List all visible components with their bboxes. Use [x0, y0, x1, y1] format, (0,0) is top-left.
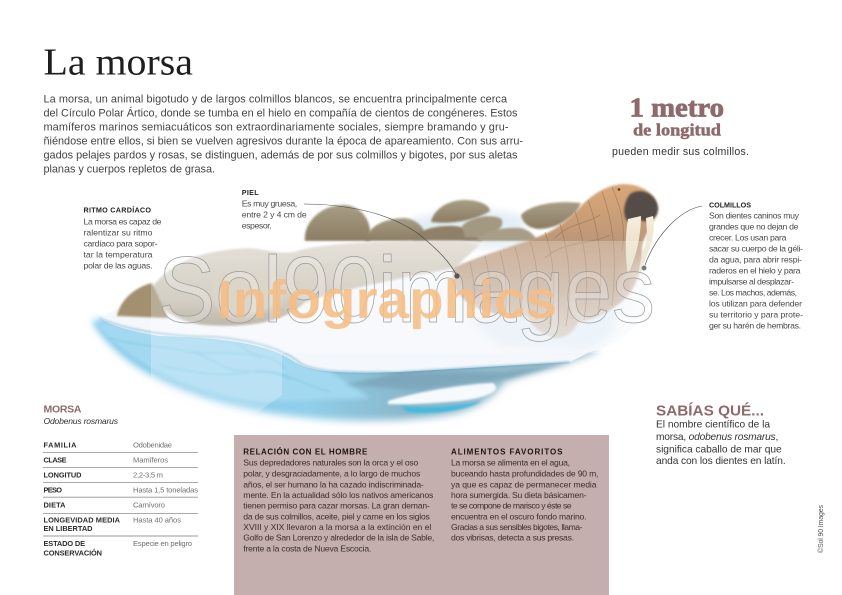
table rows	[43, 440, 198, 557]
label: ritmo cardíaco: cardíaco para sopor-	[84, 239, 158, 249]
callout: sabías qué: El nombre científico de la	[656, 419, 770, 430]
intro text block: La morsa, un animal bigotudo y de largos colmillos blancos, se encuentra principalmente cerca	[44, 94, 508, 106]
tusk left	[626, 216, 641, 274]
callout: 1 metro de longitud: de longitud	[633, 120, 721, 140]
label: colmillos: se. Los machos, además,	[709, 288, 797, 298]
water	[92, 320, 600, 421]
label: piel: Es muy gruesa,	[242, 199, 297, 209]
walrus muzzle	[624, 191, 658, 223]
column: relación con el hombre: tienen permiso para cazar morsas. La gran deman-	[243, 501, 430, 511]
tusk right	[639, 216, 654, 277]
panel: relación con el hombre y alimentos favoritos	[234, 435, 609, 595]
table rows: Odobenidae	[133, 440, 172, 449]
far rocks	[305, 200, 581, 241]
table rows: Hasta 40 años	[133, 515, 181, 524]
table rows: EN LIBERTAD	[44, 524, 93, 533]
species name: Odobenus rosmarus	[44, 416, 119, 426]
column: relación con el hombre: Sus depredadores naturales son la orca y el oso	[243, 458, 419, 468]
column: relación con el hombre: XVIII y XIX llevaron a la morsa a la extinción en el	[243, 522, 431, 532]
column: alimentos favoritos: te se compone de marisco y éste se	[451, 501, 572, 511]
species name	[44, 404, 119, 426]
column: relación con el hombre: frente a la costa de Nueva Escocia.	[243, 543, 371, 553]
column: relación con el hombre: años, el ser humano la ha cazado indiscriminada-	[243, 479, 424, 489]
species fact table	[43, 404, 198, 557]
walrus wrinkles	[470, 187, 624, 326]
intro text block: mamíferos marinos semiacuáticos son extraordinariamente sociales, siempre bramando y gru-	[44, 122, 509, 134]
column: relación con el hombre: RELACIÓN CON EL HOMBRE	[243, 447, 368, 456]
label: colmillos: ger su harén de hembras.	[709, 321, 801, 331]
leader: piel	[304, 204, 460, 279]
table rows: 2,2-3,5 m	[133, 470, 163, 479]
intro text block: planas y cuerpos repletos de grasa.	[44, 164, 215, 176]
callout: 1 metro de longitud: 1 metro	[630, 92, 724, 122]
table rows: LONGEVIDAD MEDIA	[44, 515, 121, 524]
label: ritmo cardíaco: polar de las aguas.	[84, 261, 152, 271]
callout: sabías qué	[656, 403, 786, 467]
table rows: Carnívoro	[133, 500, 165, 509]
callout: sabías qué: morsa, odobenus rosmarus,	[656, 432, 778, 443]
label: piel: entre 2 y 4 cm de	[242, 210, 307, 220]
label: colmillos: grandes que no dejan de	[709, 222, 799, 232]
table rows: DIETA	[44, 500, 66, 509]
column: relación con el hombre: mente. En la actualidad sólo los nativos americanos	[243, 490, 433, 500]
ice background	[100, 262, 648, 373]
label: ritmo cardíaco	[84, 206, 162, 271]
column: alimentos favoritos: encuentra en el oscuro fondo marino.	[451, 511, 586, 521]
label: colmillos: raderos en el hielo y para	[709, 266, 801, 276]
small ice floe	[388, 383, 496, 404]
watermark: Sol90images: Sol90images	[158, 237, 655, 342]
column: alimentos favoritos: hora sumergida. Su dieta básicamen-	[451, 490, 587, 500]
column: relación con el hombre: da de sus colmillos, aceite, piel y carne en los siglos	[243, 511, 430, 521]
label: piel: PIEL	[242, 188, 259, 197]
table rows: Hasta 1,5 toneladas	[133, 485, 198, 494]
intro text block: gados pelajes pardos y rosas, se distinguen, además de por sus colmillos y bigotes, por sus aletas	[44, 150, 518, 162]
callout: 1 metro de longitud	[612, 92, 749, 158]
walrus	[453, 184, 658, 338]
column: alimentos favoritos	[451, 447, 598, 543]
watermark panel	[151, 241, 660, 414]
watermark: Infographics: Infographics	[217, 270, 557, 330]
label: ritmo cardíaco: RITMO CARDÍACO	[84, 206, 151, 215]
label: piel: espesor.	[242, 220, 272, 230]
title: La morsa	[44, 42, 193, 84]
label: colmillos: Son dientes caninos muy	[709, 211, 800, 221]
label: colmillos: su territorio y para prote-	[709, 310, 803, 320]
intro text block: ñiéndose entre ellos, si bien se vuelven agresivos durante la época de apareamiento. Con sus arru-	[44, 136, 523, 148]
label: colmillos: sacar su cuerpo de la géli-	[709, 244, 803, 254]
label: colmillos: da agua, para abrir respi-	[709, 255, 802, 265]
label: colmillos: impulsarse al desplazar-	[709, 277, 794, 287]
table rows: Mamíferos	[133, 455, 168, 464]
column: alimentos favoritos: ALIMENTOS FAVORITOS	[451, 447, 563, 456]
label: piel	[242, 188, 307, 230]
intro text block	[44, 94, 523, 176]
column: alimentos favoritos: ya que es capaz de permanecer media	[451, 479, 597, 489]
walrus body	[453, 184, 657, 338]
label: ritmo cardíaco: La morsa es capaz de	[84, 216, 162, 226]
table rows: PESO	[44, 485, 62, 494]
callout: sabías qué: SABÍAS QUÉ...	[656, 403, 764, 420]
table rows: FAMILIA	[44, 440, 77, 449]
column: alimentos favoritos: La morsa se alimenta en el agua,	[451, 458, 570, 468]
table rows: CLASE	[44, 455, 67, 464]
callout: sabías qué: significa caballo de mar que	[656, 444, 782, 455]
table rows: CONSERVACIÓN	[44, 548, 102, 557]
label: colmillos: los utilizan para defender	[709, 299, 802, 309]
label: colmillos: crecer. Los usan para	[709, 233, 787, 243]
callout: sabías qué: anda con los dientes en latín.	[656, 456, 786, 467]
column: relación con el hombre: polar, y desgraciadamente, a lo largo de muchos	[243, 468, 420, 478]
callout: 1 metro de longitud: pueden medir sus colmillos.	[612, 146, 749, 158]
leader: colmillos	[641, 206, 702, 271]
beige rocks	[117, 241, 480, 326]
column: alimentos favoritos: dos vibrisas, detecta a sus presas.	[451, 533, 574, 543]
table rows: ESTADO DE	[44, 539, 85, 548]
white edge fade	[590, 262, 656, 362]
lighter water with cracks	[95, 322, 570, 402]
walrus eye	[618, 188, 620, 191]
label: ritmo cardíaco: ralentizar su ritmo	[84, 228, 153, 238]
column: relación con el hombre: Golfo de San Lorenzo y alrededor de la isla de Sable,	[243, 533, 434, 543]
species name: MORSA	[44, 404, 82, 416]
credit: ©Sol 90 Images	[817, 504, 825, 553]
illustration: walrus on ice	[92, 184, 658, 421]
table rows: LONGITUD	[44, 470, 82, 479]
column: alimentos favoritos: Gracias a sus sensibles bigotes, llama-	[451, 522, 583, 532]
intro text block: del Círculo Polar Ártico, donde se tumba en el hielo en compañía de cientos de congéneres. Estos	[44, 106, 518, 120]
table rows: Especie en peligro	[133, 539, 192, 548]
label: colmillos: COLMILLOS	[709, 200, 751, 209]
cyan water strip	[400, 401, 482, 413]
label: colmillos	[709, 200, 803, 331]
column: alimentos favoritos: buceando hasta profundidades de 90 m,	[451, 468, 598, 478]
label: ritmo cardíaco: tar la temperatura	[84, 250, 153, 260]
column: relación con el hombre	[243, 447, 434, 553]
main ice floe shadow edge	[100, 318, 570, 372]
